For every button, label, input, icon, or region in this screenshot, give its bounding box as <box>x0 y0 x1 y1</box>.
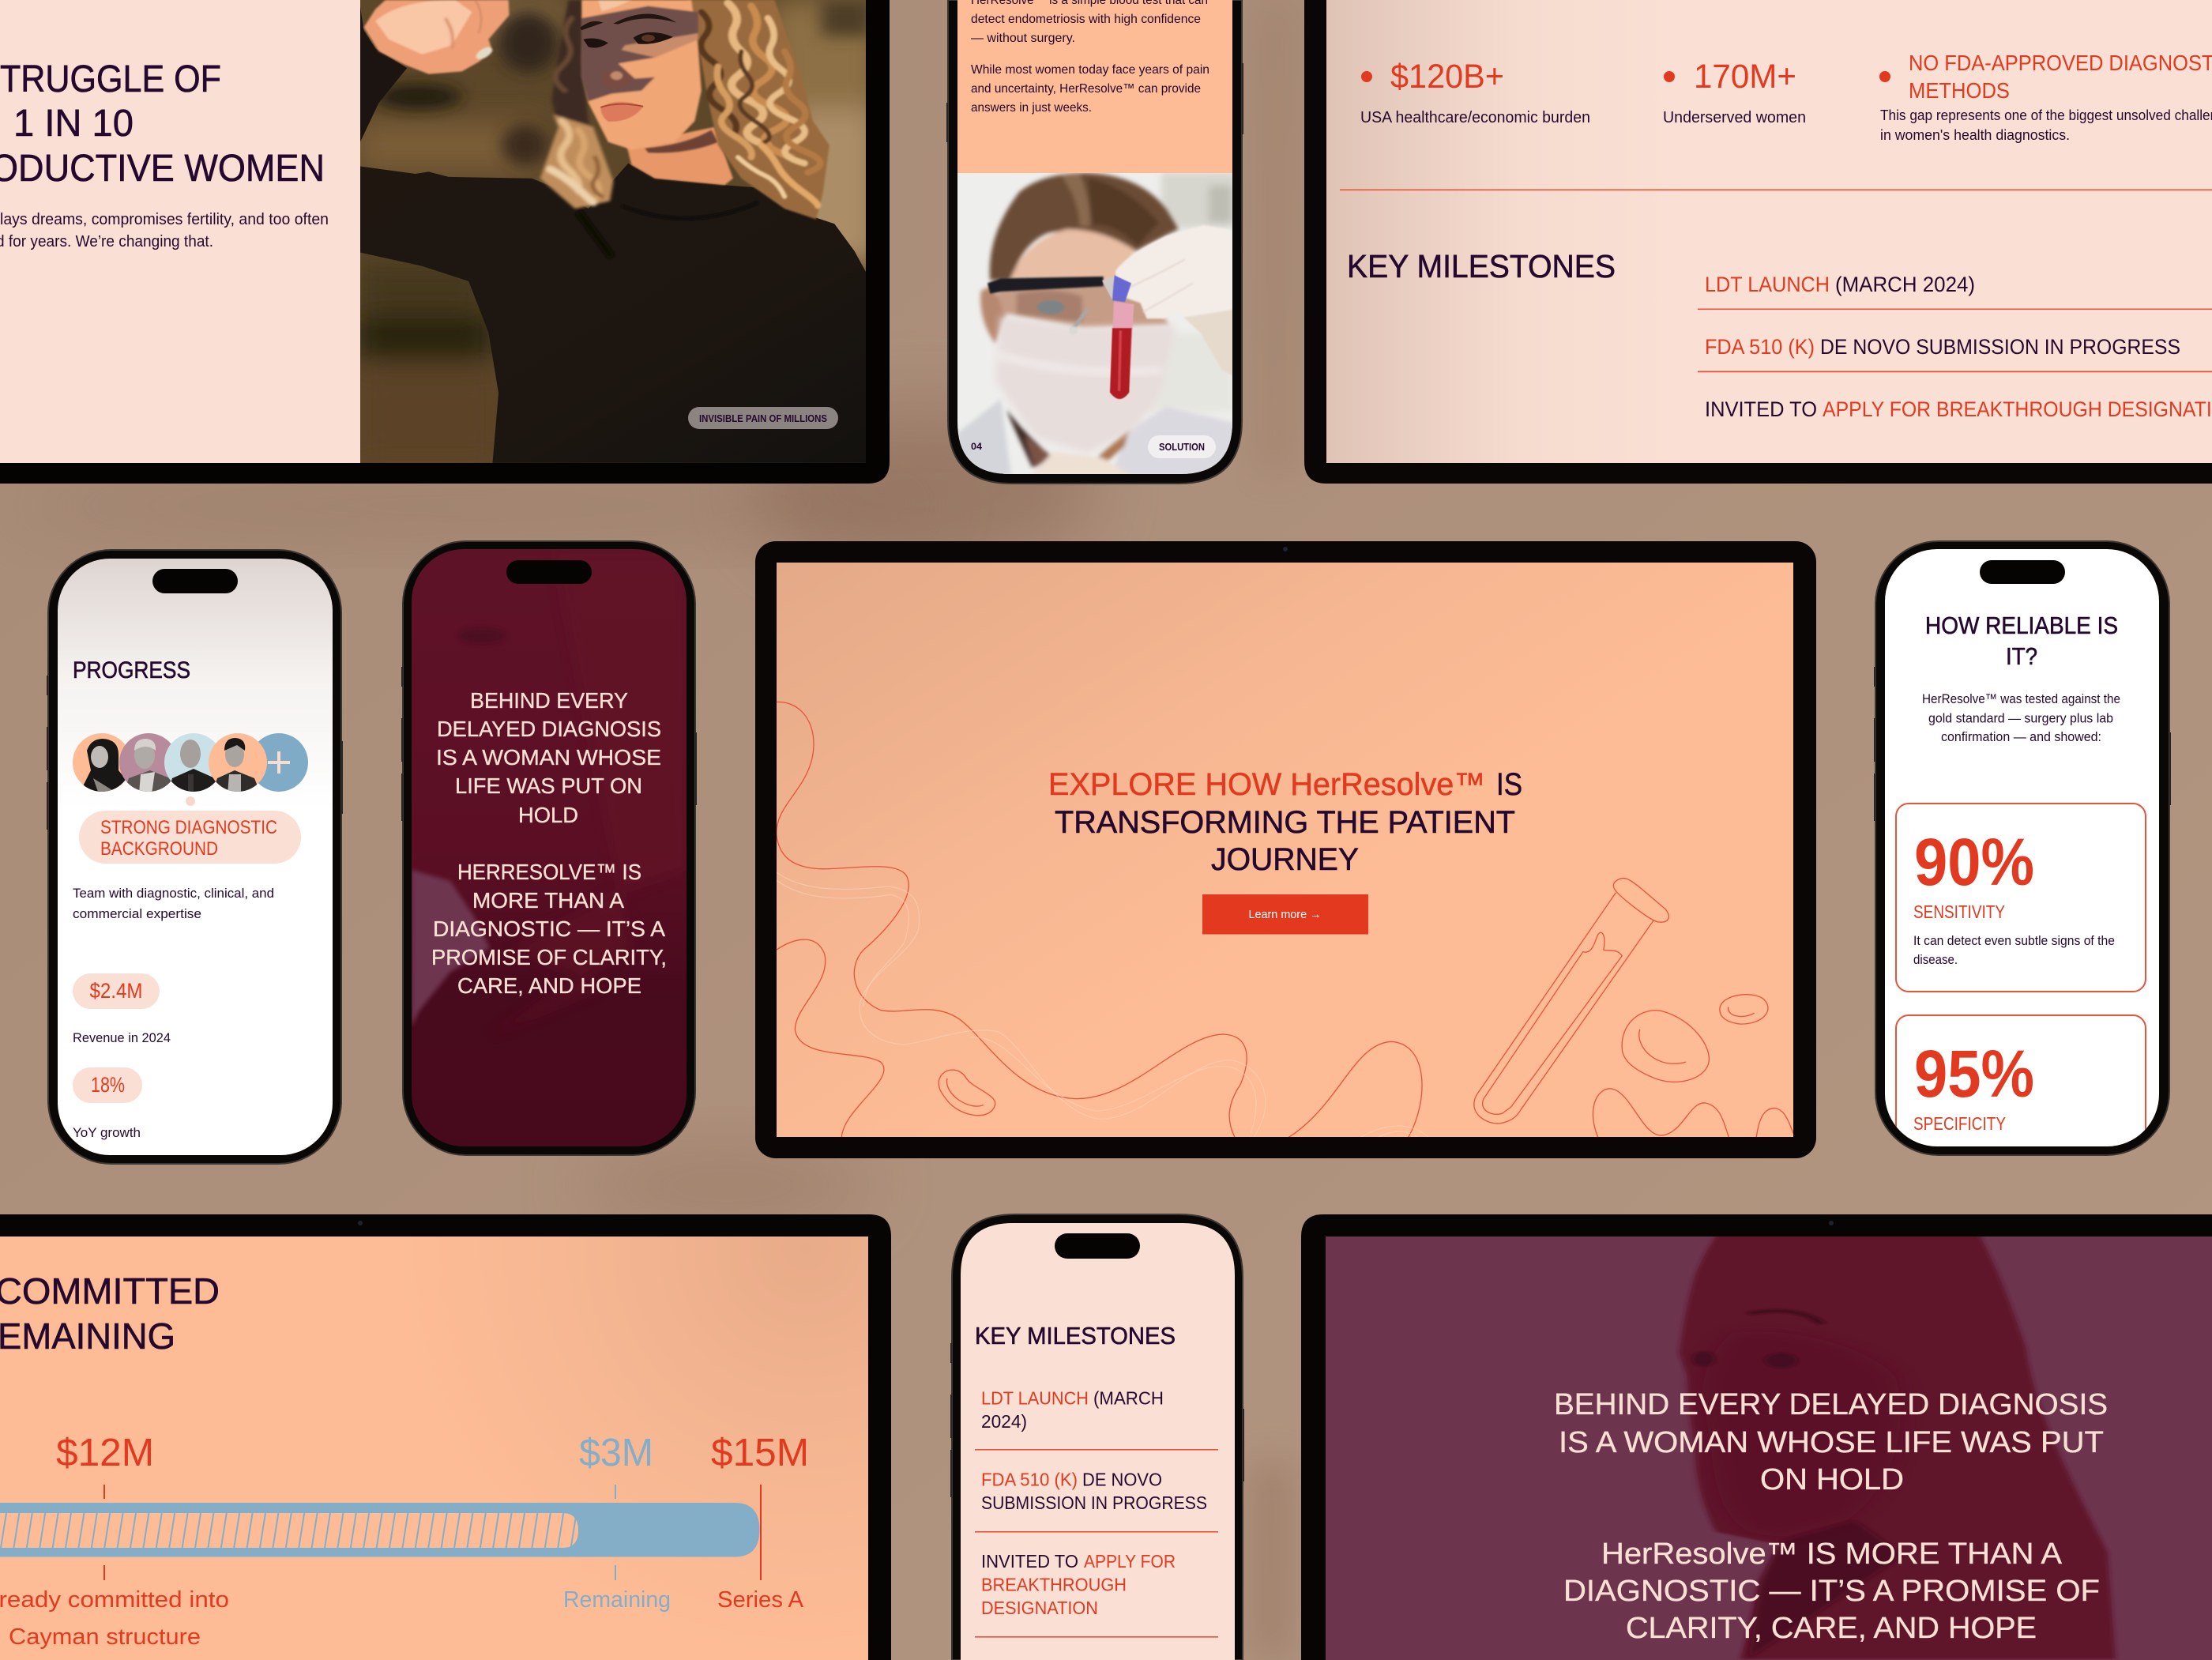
dynamic island <box>1055 1233 1140 1259</box>
face <box>581 0 702 149</box>
left hair <box>540 0 613 209</box>
peach panel <box>957 0 1232 173</box>
tablet: the struggle slide <box>0 0 890 484</box>
phone: key milestones <box>950 1214 1244 1660</box>
label: $15M series A: $15M <box>711 1432 809 1474</box>
phone: how reliable is it <box>1874 541 2171 1203</box>
milestone: FDA submission <box>975 1470 1218 1533</box>
stat: $120B+: USA healthcare/economic burden <box>1360 109 1590 126</box>
avatar: man with glasses <box>209 733 267 794</box>
tablet frame <box>1301 1214 2212 1660</box>
solution copy: detect endometriosis with high confidence <box>971 13 1201 26</box>
camera <box>1829 1221 1834 1225</box>
intro copy: confirmation — and showed: <box>1941 729 2101 744</box>
label: $12M committed: Cayman structure <box>9 1624 201 1650</box>
dynamic island <box>152 569 238 593</box>
phone frame <box>1875 541 2169 1155</box>
button: learn more: Learn more → <box>1248 908 1321 921</box>
card: specificity <box>1896 1015 2146 1203</box>
statement text: CLARITY, CARE, AND HOPE <box>1626 1612 2037 1645</box>
stat: no FDA-approved methods: in women's health diagnostics. <box>1880 126 2070 143</box>
screen with portrait overlay <box>412 549 687 1146</box>
side buttons <box>950 1343 1244 1497</box>
badge: invisible pain of millions: INVISIBLE PAIN OF MILLIONS <box>699 412 827 424</box>
team description <box>73 886 274 921</box>
solution copy: and uncertainty, HerResolve™ can provide <box>971 82 1201 96</box>
avatar: add more <box>250 733 308 792</box>
screen <box>1885 549 2159 1146</box>
gloved hand <box>1115 225 1234 377</box>
label: $12M committed <box>0 1432 229 1650</box>
statement text: ON HOLD <box>1760 1463 1904 1496</box>
statement text <box>431 688 667 998</box>
photo: woman shading eyes <box>356 0 881 463</box>
tablet: funding progress slide <box>0 1214 891 1660</box>
heading: TRUGGLE OF <box>0 58 221 100</box>
card: specificity: 95% <box>1914 1037 2034 1111</box>
camera <box>358 1221 363 1225</box>
tablet frame <box>0 1214 891 1660</box>
headline: TRANSFORMING THE PATIENT <box>1055 805 1515 840</box>
facial features <box>580 14 676 122</box>
milestone: LDT launch: (MARCH 2024) <box>1835 273 1975 296</box>
card: sensitivity <box>1896 804 2146 992</box>
slide background <box>0 1237 868 1660</box>
screen <box>58 559 333 1155</box>
badge: invisible pain of millions <box>688 407 838 429</box>
coat and neck <box>957 399 1235 476</box>
statement text <box>1554 1388 2108 1645</box>
headline: IS <box>1496 767 1522 802</box>
hand <box>364 0 510 74</box>
avatar: older man <box>119 733 178 794</box>
statement text: PROMISE OF CLARITY, <box>431 945 667 969</box>
card: sensitivity: SENSITIVITY <box>1913 902 2005 922</box>
heading: key milestones: KEY MILESTONES <box>1347 248 1616 284</box>
milestone: FDA submission: SUBMISSION IN PROGRESS <box>981 1492 1207 1513</box>
stat: 170M+ <box>1663 58 1806 126</box>
pill: strong diagnostic background <box>79 811 301 864</box>
milestone: FDA submission: FDA 510 (K) <box>981 1470 1078 1490</box>
tablet: explore how HerResolve transforms the journey <box>755 541 1816 1158</box>
milestone: breakthrough designation: BREAKTHROUGH <box>981 1574 1127 1594</box>
label: $3M remaining: $3M <box>579 1432 653 1474</box>
tablet: market and milestones slide <box>1304 0 2212 484</box>
safety glasses <box>988 277 1104 294</box>
milestone: FDA submission: DE NOVO SUBMISSION IN PROGRESS <box>1820 335 2180 359</box>
tablet frame <box>755 541 1816 1158</box>
avatar: bald man <box>164 733 223 794</box>
phone: progress slide <box>47 550 343 1164</box>
stat: growth: YoY growth <box>73 1125 141 1140</box>
statement text: DELAYED DIAGNOSIS <box>437 717 661 741</box>
pill: strong diagnostic background: STRONG DIAGNOSTIC <box>100 817 277 838</box>
side buttons <box>401 667 697 821</box>
button: learn more <box>1202 894 1368 934</box>
avatar: woman <box>73 733 134 794</box>
screen <box>777 563 1793 1137</box>
statement text: CARE, AND HOPE <box>457 973 641 998</box>
stat: no FDA-approved methods: METHODS <box>1909 78 2010 103</box>
stat: growth: 18% <box>91 1073 125 1097</box>
statement text: LIFE WAS PUT ON <box>455 774 642 798</box>
upper sleeve <box>360 6 407 142</box>
neck <box>626 127 733 185</box>
phone frame <box>952 1214 1243 1660</box>
carousel dot <box>186 796 195 806</box>
phone frame <box>403 541 695 1155</box>
milestone: FDA submission <box>1698 335 2212 372</box>
milestone: breakthrough designation: DESIGNATION <box>981 1598 1098 1618</box>
eye <box>1037 300 1064 314</box>
phone: solution slide <box>946 0 1243 484</box>
card: sensitivity: disease. <box>1913 952 1958 967</box>
photo: scientist with blood tube <box>956 172 1235 476</box>
decorative line art <box>777 702 1793 1138</box>
statement text: DIAGNOSTIC — IT’S A PROMISE OF <box>1563 1575 2100 1608</box>
page number: 04 <box>971 441 982 452</box>
statement text: HOLD <box>518 803 578 827</box>
statement text: IS A WOMAN WHOSE <box>436 745 661 770</box>
statement text: DIAGNOSTIC — IT’S A <box>433 917 665 941</box>
slide background <box>1326 0 2212 463</box>
tablet frame <box>1304 0 2212 484</box>
dynamic island <box>506 560 592 584</box>
team description: Team with diagnostic, clinical, and <box>73 886 274 901</box>
side buttons <box>946 63 1243 142</box>
card: sensitivity: It can detect even subtle signs of the <box>1913 933 2115 948</box>
badge: solution: SOLUTION <box>1159 441 1205 453</box>
milestone: breakthrough designation <box>975 1551 1218 1638</box>
body copy <box>0 211 329 250</box>
side buttons <box>1874 667 2171 821</box>
statement text: BEHIND EVERY DELAYED DIAGNOSIS <box>1554 1388 2108 1421</box>
heading: EMAINING <box>0 1316 175 1357</box>
milestone: LDT launch <box>1698 273 2212 310</box>
stat: revenue <box>73 973 171 1045</box>
heading: IT? <box>2006 642 2037 670</box>
statement text: BEHIND EVERY <box>470 688 628 713</box>
headline: JOURNEY <box>1211 842 1359 877</box>
side buttons <box>47 676 343 830</box>
team description: commercial expertise <box>73 906 201 921</box>
solution copy: — without surgery. <box>971 32 1075 45</box>
badge: solution <box>1148 435 1216 458</box>
progress bar <box>0 1503 760 1556</box>
solution copy <box>971 0 1209 115</box>
intro copy <box>1922 691 2120 744</box>
stat: $120B+: $120B+ <box>1390 58 1504 96</box>
headline <box>1048 767 1522 877</box>
milestone: LDT launch: LDT LAUNCH <box>981 1387 1089 1408</box>
stat: 170M+: Underserved women <box>1663 109 1806 126</box>
phone frame <box>48 550 341 1164</box>
heading: KEY MILESTONES <box>975 1322 1176 1349</box>
dynamic island <box>1980 560 2065 584</box>
hair and face <box>980 173 1179 344</box>
statement text: HerResolve™ IS MORE THAN A <box>1601 1538 2063 1571</box>
blood tube <box>1102 275 1134 399</box>
text panel <box>0 0 360 463</box>
statement text: IS A WOMAN WHOSE LIFE WAS PUT <box>1559 1426 2104 1459</box>
heading <box>0 65 322 182</box>
solution copy: answers in just weeks. <box>971 101 1092 115</box>
mask <box>995 316 1176 453</box>
pill: strong diagnostic background: BACKGROUND <box>100 838 218 860</box>
stat: growth <box>73 1067 142 1140</box>
heading <box>1925 612 2118 670</box>
stat: revenue: $2.4M <box>90 979 142 1003</box>
milestone: LDT launch <box>975 1387 1218 1451</box>
heading <box>0 1270 220 1357</box>
tablet frame <box>0 0 890 484</box>
milestone: FDA submission: DE NOVO <box>1082 1470 1162 1490</box>
intro copy: gold standard — surgery plus lab <box>1928 711 2113 725</box>
label: $3M remaining: Remaining <box>563 1587 671 1613</box>
right hair <box>688 0 830 219</box>
sweater <box>360 164 867 463</box>
label: $12M committed: $12M <box>56 1432 154 1474</box>
heading: HOW RELIABLE IS <box>1925 612 2118 639</box>
milestone: breakthrough designation: APPLY FOR <box>1084 1551 1176 1572</box>
stat: no FDA-approved methods <box>1879 51 2212 143</box>
milestone: breakthrough designation: INVITED TO <box>1705 397 1817 421</box>
statement text: HERRESOLVE™ IS <box>457 860 641 884</box>
statement text: MORE THAN A <box>472 888 624 913</box>
milestone: LDT launch: (MARCH <box>1093 1387 1164 1408</box>
stat: revenue: Revenue in 2024 <box>73 1030 171 1045</box>
stat: $120B+ <box>1360 58 1590 126</box>
heading: progress: PROGRESS <box>73 657 190 683</box>
stat: 170M+: 170M+ <box>1694 58 1796 96</box>
heading: ODUCTIVE WOMEN <box>0 148 325 190</box>
milestone: breakthrough designation: INVITED TO <box>981 1551 1078 1572</box>
label: $15M series A: Series A <box>717 1587 804 1613</box>
tablet: behind every delayed diagnosis <box>1301 1214 2212 1660</box>
card: sensitivity: 90% <box>1914 825 2034 899</box>
team avatars <box>73 733 308 794</box>
headline: EXPLORE HOW HerResolve™ <box>1048 767 1485 802</box>
phone frame <box>948 0 1242 484</box>
intro copy: HerResolve™ was tested against the <box>1922 691 2120 706</box>
slide background with portrait <box>1326 1230 2212 1660</box>
card: specificity: SPECIFICITY <box>1913 1113 2006 1134</box>
milestone: FDA submission: FDA 510 (K) <box>1705 335 1815 359</box>
heading: COMMITTED <box>0 1270 220 1312</box>
solution copy: While most women today face years of pain <box>971 63 1209 77</box>
label: $3M remaining <box>563 1432 671 1613</box>
heading: 1 IN 10 <box>13 103 134 145</box>
phone: behind every delayed diagnosis <box>401 541 697 1155</box>
screen <box>961 1223 1235 1660</box>
body copy: d for years. We’re changing that. <box>0 233 213 250</box>
label: $15M series A <box>711 1432 809 1613</box>
milestone: LDT launch: 2024) <box>981 1411 1027 1432</box>
milestone: LDT launch: LDT LAUNCH <box>1705 273 1830 296</box>
camera <box>1283 547 1288 551</box>
body copy: lays dreams, compromises fertility, and too often <box>0 211 329 228</box>
